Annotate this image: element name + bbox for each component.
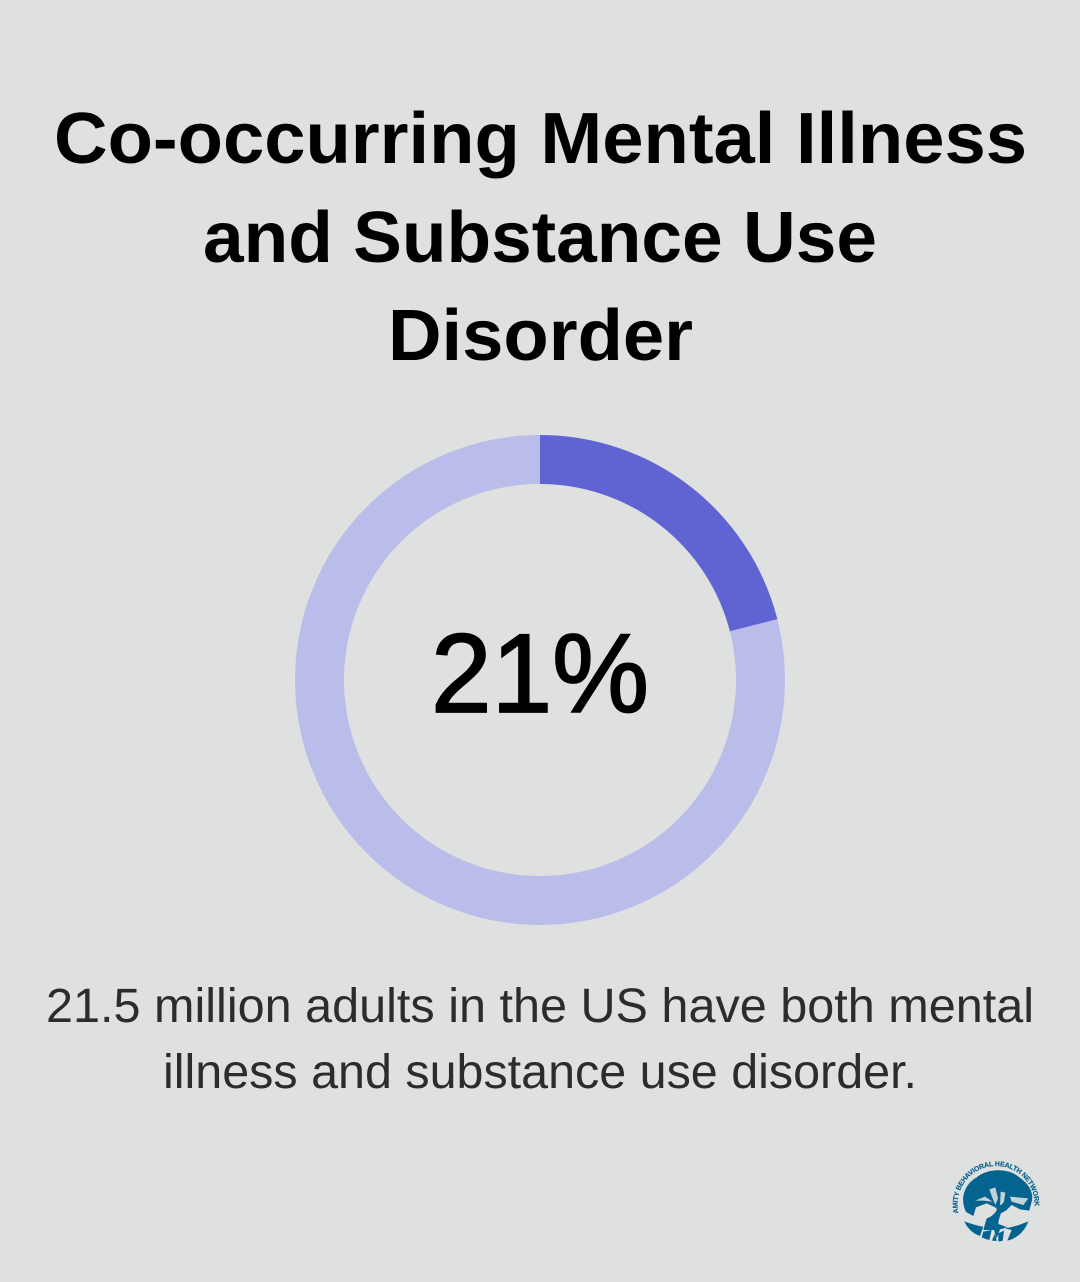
logo arc text <box>958 1166 1035 1213</box>
title: and Substance Use <box>203 198 877 278</box>
description text <box>46 980 1034 1099</box>
description text: illness and substance use disorder. <box>163 1046 917 1099</box>
logo root crescent <box>964 1221 1028 1241</box>
donut chart: 21% <box>320 459 760 900</box>
title: Co-occurring Mental Illness <box>54 99 1027 179</box>
donut value: 21% <box>431 611 649 736</box>
title <box>54 99 1027 376</box>
logo: Amity Behavioral Health Network: AMITY BEHAVIORAL HEALTH NETWORK <box>952 1161 1040 1213</box>
logo: Amity Behavioral Health Network <box>952 1161 1040 1242</box>
description text: 21.5 million adults in the US have both mental <box>46 980 1034 1033</box>
title: Disorder <box>388 296 693 376</box>
logo tree and roots <box>963 1170 1032 1241</box>
logo branch highlights <box>975 1187 1028 1207</box>
logo canopy <box>963 1170 1032 1216</box>
logo trunk <box>983 1205 1007 1238</box>
